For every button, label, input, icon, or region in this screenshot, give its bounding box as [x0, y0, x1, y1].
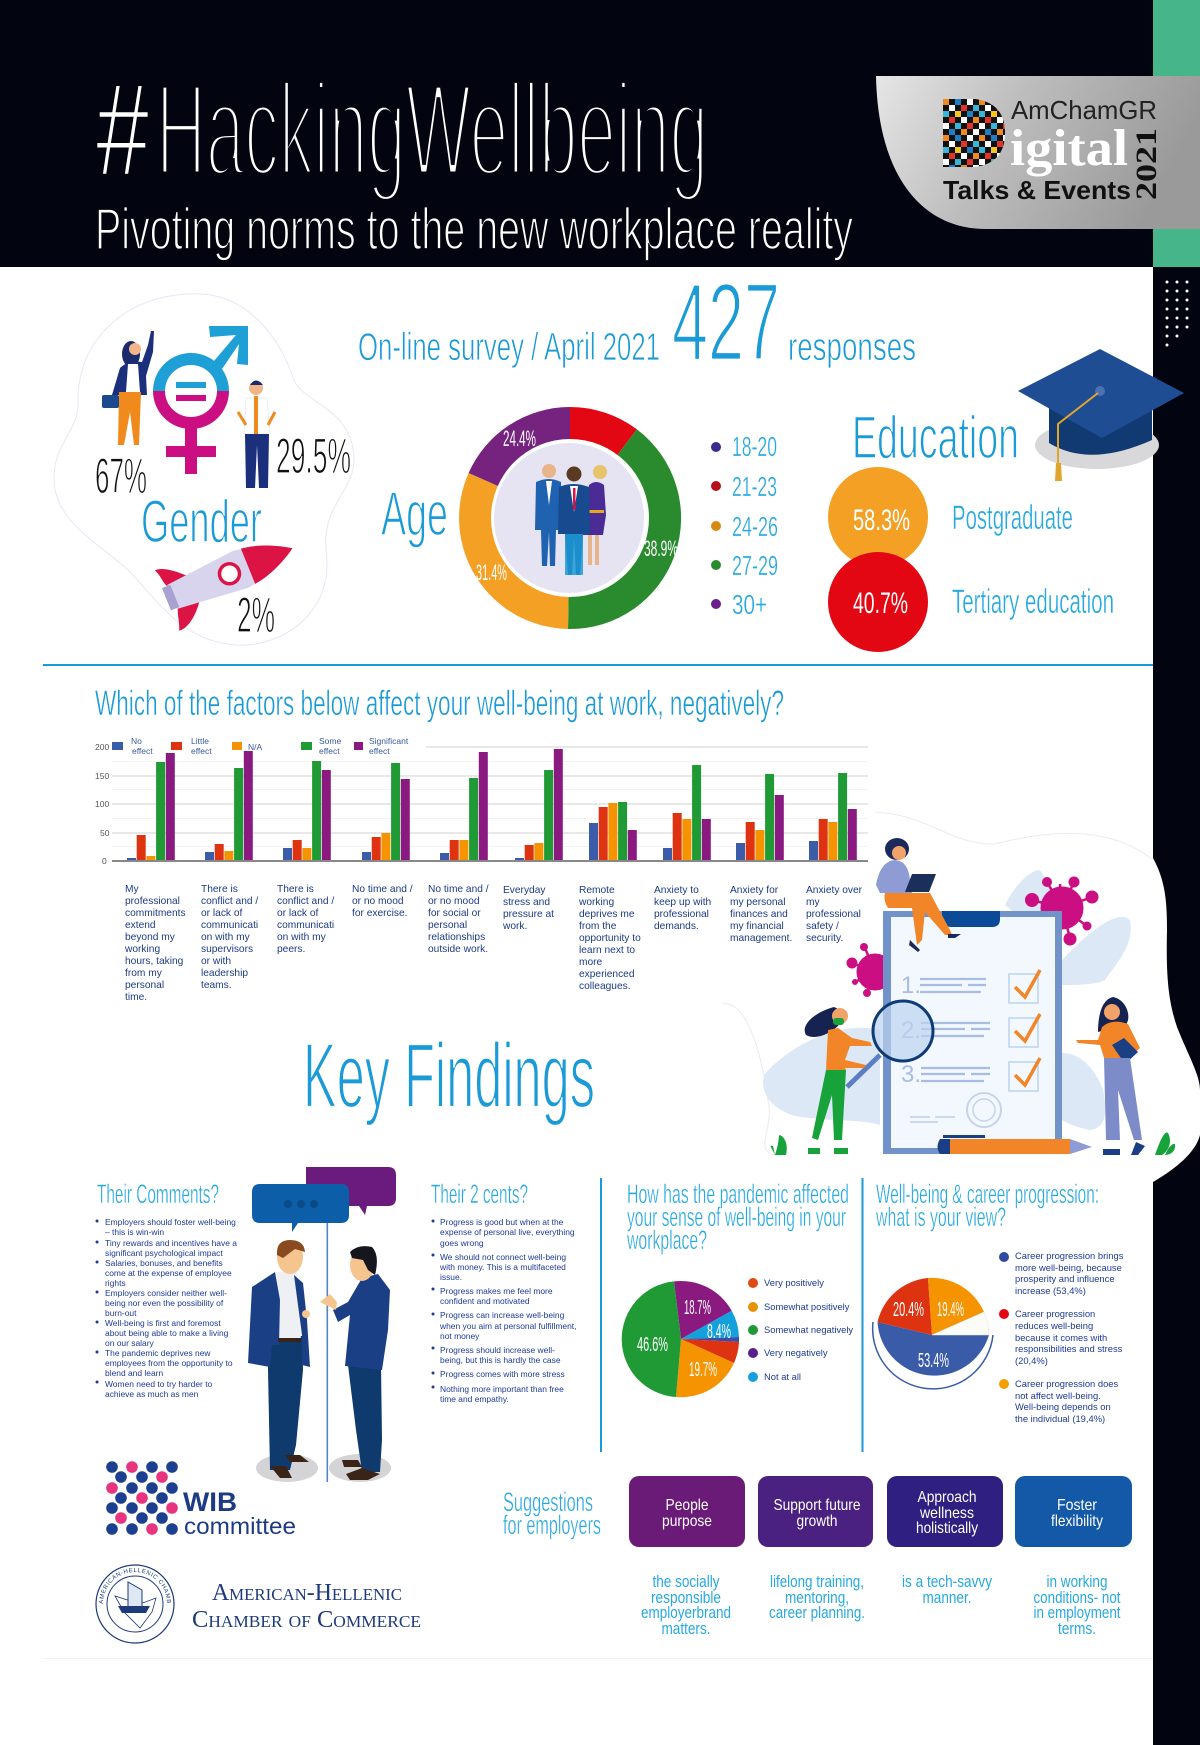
heading: key findings: Key Findings [303, 1025, 595, 1127]
caption: people purpose: employerbrand [641, 1604, 731, 1622]
pie chart: career: 20.4% [893, 1299, 924, 1321]
caption: flexibility: in employment [1034, 1604, 1121, 1622]
icon: gender symbol [153, 326, 248, 474]
legend: career [999, 1250, 1124, 1424]
label 8: keep up with [654, 897, 711, 908]
man left [248, 1240, 310, 1478]
panel: suggestions for employers: for employers [503, 1510, 601, 1540]
bullet list: comments: achieve as much as men [105, 1389, 199, 1399]
legend: age: 30+ [732, 589, 767, 620]
bullet list: comments: Employers should foster well-being [105, 1217, 236, 1227]
pie chart: pandemic: 18.7% [684, 1297, 711, 1319]
legend: career: prosperity and influence [1015, 1273, 1115, 1284]
panel: their comments [96, 1179, 237, 1399]
card: foster flexibility: flexibility [1051, 1513, 1103, 1530]
label 5: relationships [428, 932, 485, 943]
legend: age: 18-20 [732, 431, 777, 462]
logo: WIB committee [106, 1461, 296, 1539]
legend: age [711, 431, 778, 620]
bullet list: comments: blend and learn [105, 1368, 163, 1378]
bullet list: 2 cents: with money. This is a multifaceted [439, 1262, 566, 1272]
legend: career: not affect well-being. [1015, 1390, 1101, 1401]
item 2 [901, 1014, 1040, 1047]
stat: tertiary education [828, 552, 1114, 652]
panel: gender: 2% [237, 587, 275, 643]
logo: American-Hellenic Chamber of Commerce: Chamber of Commerce [192, 1607, 421, 1633]
illustration: checklist with people [722, 812, 1175, 1155]
bar chart: factors affecting well-being [95, 736, 868, 866]
label 6: Everyday [503, 885, 546, 896]
heading: Suggestions [503, 1487, 593, 1517]
pie chart: pandemic: 19.7% [689, 1359, 717, 1381]
label 1: from my [125, 968, 163, 979]
survey headline [358, 261, 916, 384]
legend: Little [191, 736, 209, 746]
stamp [967, 1093, 1001, 1127]
speech bubble blue [252, 1184, 349, 1232]
legend: career: Career progression does [1015, 1378, 1118, 1389]
panel: pandemic effect: your sense of well-being in your [627, 1202, 846, 1232]
label 7: Remote [579, 885, 615, 896]
label 7: learn next to [579, 945, 635, 956]
label 1: beyond my [125, 932, 176, 943]
bullet list: comments: on our salary [105, 1338, 155, 1348]
chart: age donut: 31.4% [476, 560, 507, 585]
badge: AmChamGR Digital Talks & Events 2021: igital [1010, 120, 1128, 177]
bars group 7 [589, 802, 637, 861]
logo: American-Hellenic Chamber of Commerce [95, 1564, 421, 1644]
label 9: Anxiety for [730, 885, 779, 896]
pie chart: pandemic: 46.6% [637, 1334, 668, 1356]
card: foster flexibility: Foster [1057, 1497, 1098, 1514]
logo: American-Hellenic Chamber of Commerce: AMERICAN-HELLENIC CHAMBER [98, 1568, 171, 1604]
bullet list: comments: Employers consider neither well- [105, 1288, 227, 1298]
label 4: or no mood [352, 896, 404, 907]
legend: age: 24-26 [732, 511, 778, 542]
legend: N/A [248, 742, 262, 752]
bars group 2 [205, 751, 253, 861]
caption: people purpose: matters. [662, 1620, 710, 1638]
label 5: No time and / [428, 884, 489, 895]
badge: AmChamGR Digital Talks & Events 2021: Talks & Events [943, 175, 1131, 205]
caption: future growth: mentoring, [785, 1589, 849, 1607]
badge: AmChamGR Digital Talks & Events 2021: AmChamGR [1011, 95, 1157, 125]
axis labels: 100 [95, 799, 109, 809]
label 4: No time and / [352, 884, 413, 895]
legend: age: 27-29 [732, 550, 778, 581]
heading: education: Education [852, 404, 1019, 471]
caption: people purpose [641, 1573, 731, 1638]
legend: career: responsibilities and stress [1015, 1343, 1123, 1354]
panel: career progression: what is your view? [875, 1202, 1006, 1232]
panel: their 2 cents [431, 1179, 576, 1404]
label 2: leadership [201, 968, 248, 979]
label 9: finances and [730, 909, 788, 920]
panel: pandemic effect: workplace? [626, 1225, 707, 1255]
label 10: my [806, 897, 820, 908]
legend: pandemic: Somewhat positively [764, 1301, 850, 1312]
label 2: or with [201, 956, 231, 967]
legend: age: 21-23 [732, 471, 777, 502]
bullet list: 2 cents [432, 1217, 576, 1404]
label 5: or no mood [428, 896, 480, 907]
chart: age donut [459, 407, 681, 629]
card: support future growth [758, 1476, 873, 1547]
badge: AmChamGR Digital Talks & Events 2021: 2021 [1130, 128, 1163, 200]
axis labels: 0 [102, 856, 107, 866]
caption: future growth: career planning. [769, 1604, 865, 1622]
bullet list: 2 cents: time and empathy. [440, 1394, 509, 1404]
pie chart: career: 19.4% [937, 1299, 964, 1321]
label 2: or lack of [201, 908, 243, 919]
speech bubble purple [306, 1167, 396, 1215]
panel: their comments: Their Comments? [97, 1179, 219, 1209]
seal [96, 1565, 174, 1643]
card: approach wellness holistically: holistically [916, 1520, 978, 1537]
label 7: colleagues. [579, 981, 631, 992]
caption: people purpose: responsible [651, 1589, 721, 1607]
caption: flexibility: terms. [1058, 1620, 1096, 1638]
item 1: 1. [901, 972, 921, 999]
magnifier [847, 1001, 933, 1087]
caption: flexibility: in working [1046, 1573, 1108, 1591]
label 2: supervisors [201, 944, 253, 955]
bullet list: 2 cents: Progress makes me feel more [440, 1286, 553, 1296]
bullet list: comments: come at the expense of employee [105, 1268, 232, 1278]
legend: effect [191, 746, 212, 756]
legend: career: increase (53,4%) [1015, 1285, 1086, 1296]
card: support future growth: Support future [774, 1497, 861, 1514]
label 1: commitments [125, 908, 186, 919]
woman on right [1076, 997, 1145, 1155]
caption: people purpose: the socially [652, 1573, 720, 1591]
label 4: for exercise. [352, 908, 407, 919]
axis labels [95, 742, 110, 866]
bullet list: 2 cents: Progress can increase well-being [440, 1310, 565, 1320]
badge: AmChamGR Digital Talks & Events 2021 [876, 76, 1200, 229]
item 2: 2. [901, 1017, 921, 1044]
bullet list: 2 cents: confident and motivated [440, 1296, 530, 1306]
logo: American-Hellenic Chamber of Commerce: American-Hellenic [212, 1580, 402, 1606]
caption: future growth: lifelong training, [770, 1573, 864, 1591]
caption: wellness [902, 1573, 993, 1607]
white blob cut into side strip [1153, 858, 1200, 1182]
panel: career progression [873, 1179, 1124, 1424]
label 3: conflict and / [277, 896, 334, 907]
clipboard [883, 911, 1062, 1154]
icon: virus right [1026, 877, 1098, 945]
bullet list: 2 cents: being, but this is hardly the case [440, 1355, 561, 1365]
logo: WIB committee: committee [184, 1513, 296, 1539]
caption: wellness: manner. [922, 1589, 972, 1607]
bullet list: comments: Well-being is first and foremost [105, 1318, 221, 1328]
label 8: professional [654, 909, 709, 920]
label 1: extend [125, 920, 156, 931]
bullet list: comments: employees from the opportunity to [105, 1358, 233, 1368]
label 10: safety / [806, 921, 839, 932]
icon: graduation cap [1018, 349, 1184, 481]
woman on top with laptop [876, 838, 961, 952]
label 9: management. [730, 933, 792, 944]
stat: postgraduate: 58.3% [853, 504, 910, 537]
legend: effect [132, 746, 153, 756]
legend: Some [319, 736, 341, 746]
label 2: teams. [201, 980, 232, 991]
label 10: professional [806, 909, 861, 920]
label 1: personal [125, 980, 164, 991]
bullet list: comments: significant psychological impact [105, 1248, 223, 1258]
caption: flexibility: conditions- not [1034, 1589, 1121, 1607]
card: approach wellness holistically: Approach [918, 1489, 976, 1506]
label 3: peers. [277, 944, 305, 955]
panel: age [381, 407, 778, 629]
logo: WIB committee: WIB [183, 1487, 237, 1517]
factor labels [124, 884, 863, 1003]
legend: career: Career progression [1015, 1308, 1095, 1319]
bars group 5 [440, 752, 488, 861]
bullet list: comments: being nor even the possibility of [105, 1298, 224, 1308]
chart: age donut: 38.9% [644, 536, 678, 561]
label 6: stress and [503, 897, 550, 908]
bullet list: 2 cents: We should not connect well-being [440, 1252, 566, 1262]
stat: tertiary education: 40.7% [853, 587, 908, 620]
icon: mosaic D [943, 99, 1005, 167]
card: support future growth: growth [796, 1513, 838, 1530]
label 1: time. [125, 992, 147, 1003]
legend: Significant [369, 736, 409, 746]
label 7: deprives me [579, 909, 635, 920]
legend: pandemic: Somewhat negatively [764, 1324, 853, 1335]
panel: their 2 cents: Their 2 cents? [431, 1179, 528, 1209]
caption: future growth [769, 1573, 865, 1622]
heading: gender: Gender [141, 488, 262, 555]
pencil [938, 1135, 1092, 1154]
heading: How has the pandemic affected [627, 1179, 849, 1209]
axis labels: 50 [100, 828, 110, 838]
bullet list: 2 cents: expense of personal live, everything [440, 1227, 575, 1237]
bullet list: comments: burn-out [105, 1308, 137, 1318]
legend: effect [319, 746, 340, 756]
bullet list: 2 cents: not money [440, 1331, 480, 1341]
caption: wellness: is a tech-savvy [902, 1573, 993, 1591]
legend: career: reduces well-being [1015, 1320, 1093, 1331]
axis labels: 150 [95, 771, 109, 781]
label 2: communicati [201, 920, 258, 931]
bullet list: 2 cents: issue. [440, 1272, 462, 1282]
label 6: pressure at [503, 909, 554, 920]
survey headline: On-line survey / April 2021 [358, 326, 660, 369]
bullet list: comments: about being able to make a living [105, 1328, 229, 1338]
plants [771, 1132, 1175, 1155]
illustration: two businessmen with speech bubbles [248, 1167, 396, 1482]
bullet list: comments: Tiny rewards and incentives have a [105, 1238, 237, 1248]
man right [320, 1246, 390, 1480]
label 7: opportunity to [579, 933, 641, 944]
card: people purpose: purpose [662, 1513, 712, 1530]
card: approach wellness holistically: wellness [919, 1505, 974, 1522]
icon: virus left [847, 944, 893, 996]
pie chart: pandemic [622, 1281, 739, 1397]
label 5: personal [428, 920, 467, 931]
heading: age: Age [381, 480, 448, 549]
pie chart: career [873, 1278, 993, 1389]
bullet list: 2 cents: Progress comes with more stress [440, 1369, 565, 1379]
woman with magnifier [805, 1007, 872, 1154]
stat: postgraduate [828, 467, 1073, 567]
bullet list: 2 cents: Progress should increase well- [440, 1345, 555, 1355]
bullet list: comments: – this is win-win [105, 1227, 164, 1237]
item 3 [901, 1058, 1040, 1091]
title: # [96, 56, 149, 203]
label 1: hours, taking [125, 956, 184, 967]
gender percentages: 67% [95, 448, 147, 504]
bullet list: 2 cents: Progress is good but when at the [440, 1217, 564, 1227]
pie chart: career: 53.4% [918, 1350, 949, 1372]
label 3: on with my [277, 932, 327, 943]
label 10: Anxiety over [806, 885, 863, 896]
label 2: on with my [201, 932, 251, 943]
label 8: demands. [654, 921, 699, 932]
bars group 6 [515, 749, 563, 861]
legend: No [131, 736, 142, 746]
label 9: my financial [730, 921, 784, 932]
label 2: There is [201, 884, 238, 895]
icon: man [238, 380, 275, 488]
label 5: for social or [428, 908, 481, 919]
bars group 10 [809, 773, 857, 861]
legend: pandemic [748, 1277, 853, 1382]
bullet list: comments [96, 1217, 237, 1399]
title: HackingWellbeing [156, 56, 708, 203]
bullet list: 2 cents: goes wrong [440, 1238, 484, 1248]
legend: career: Well-being depends on [1015, 1401, 1111, 1412]
legend: career: (20,4%) [1015, 1355, 1048, 1366]
label 1: working [124, 944, 160, 955]
label 10: security. [806, 933, 843, 944]
legend: pandemic: Very negatively [764, 1347, 828, 1358]
card: approach wellness holistically [887, 1476, 1003, 1547]
card: people purpose [629, 1476, 745, 1547]
legend: career: the individual (19,4%) [1015, 1413, 1105, 1424]
legend: career: Career progression brings [1015, 1250, 1124, 1261]
legend: career: because it comes with [1015, 1332, 1107, 1343]
label 3: or lack of [277, 908, 319, 919]
label 1: professional [125, 896, 180, 907]
label 6: work. [502, 921, 527, 932]
legend [112, 736, 409, 756]
bars group 9 [736, 774, 784, 861]
stat: postgraduate: Postgraduate [952, 499, 1073, 537]
header band [0, 0, 1153, 267]
bullet list: comments: Salaries, bonuses, and benefits [105, 1258, 223, 1268]
label 7: more [579, 957, 603, 968]
panel: pandemic effect [622, 1179, 853, 1397]
label 1: My [125, 884, 139, 895]
pie chart: pandemic: 8.4% [707, 1321, 731, 1343]
label 2: conflict and / [201, 896, 258, 907]
survey headline: 427 [672, 261, 780, 384]
card: foster flexibility [1015, 1476, 1132, 1547]
legend: effect [369, 746, 390, 756]
label 3: communicati [277, 920, 334, 931]
legend: pandemic: Very positively [764, 1277, 824, 1288]
bullet list: 2 cents: when you aim at personal fulfillment, [439, 1321, 576, 1331]
chart: age donut: 24.4% [503, 426, 536, 451]
bars group 4 [362, 763, 410, 861]
label 7: experienced [579, 969, 635, 980]
leaves [763, 870, 1131, 1130]
item 3: 3. [901, 1061, 921, 1088]
legend: career: more well-being, because [1015, 1262, 1122, 1273]
label 8: Anxiety to [654, 885, 699, 896]
icon: rocket [155, 519, 305, 631]
label 9: my personal [730, 897, 786, 908]
icon: three people [535, 464, 607, 575]
subtitle: Pivoting norms to the new workplace reality [95, 197, 853, 262]
panel: suggestions for employers [503, 1476, 1132, 1638]
card: people purpose: People [666, 1497, 709, 1514]
label 5: outside work. [428, 944, 488, 955]
label 7: from the [579, 921, 617, 932]
bars group 1 [127, 753, 175, 861]
bullet list: comments: rights [105, 1278, 126, 1288]
icon: woman [102, 331, 154, 445]
caption: flexibility [1034, 1573, 1121, 1638]
right side strip [1153, 0, 1200, 1745]
bullet list: 2 cents: Nothing more important than free [440, 1384, 564, 1394]
bars group 8 [663, 765, 711, 861]
panel: education [828, 349, 1184, 652]
bars group 3 [283, 761, 331, 861]
survey headline: responses [788, 326, 916, 369]
item 1 [901, 970, 1040, 1003]
panel: gender: 29.5% [276, 428, 351, 484]
bullet list: comments: The pandemic deprives new [105, 1348, 211, 1358]
legend: pandemic: Not at all [764, 1371, 801, 1382]
title [96, 56, 708, 203]
panel: gender [54, 294, 354, 645]
heading: factors question: Which of the factors below affect your well-being at work, negatively? [95, 684, 784, 723]
label 7: working [578, 897, 614, 908]
axis labels: 200 [95, 742, 109, 752]
bullet list: comments: Women need to try harder to [105, 1379, 213, 1389]
label 3: There is [277, 884, 314, 895]
